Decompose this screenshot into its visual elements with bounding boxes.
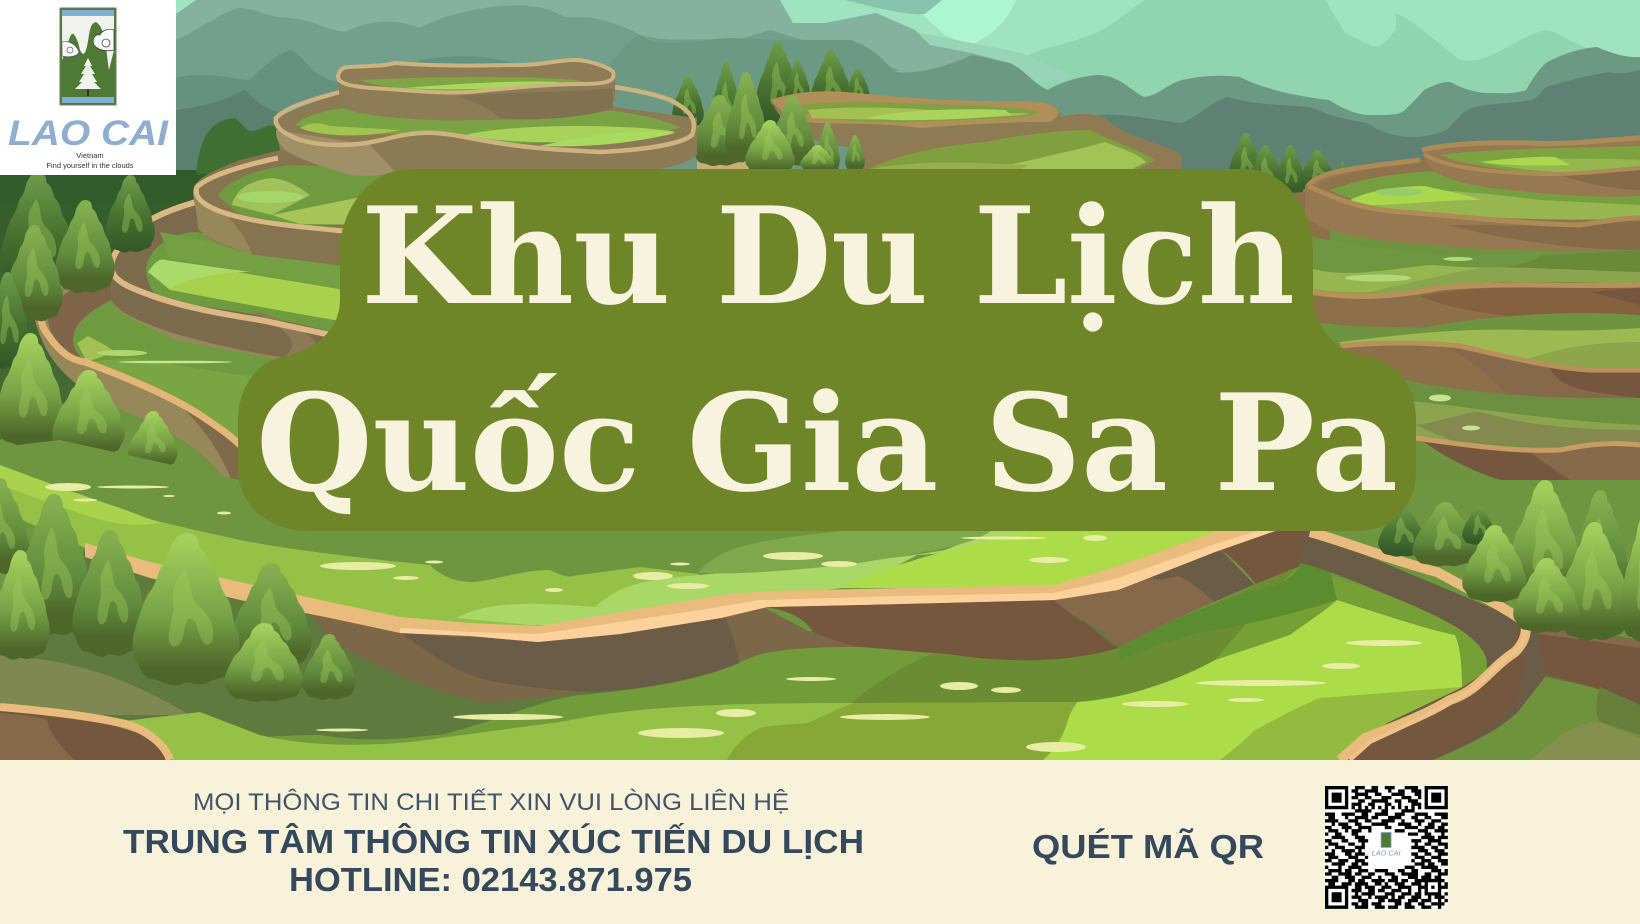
right terrace curve — [1300, 530, 1640, 760]
lower field — [70, 563, 1500, 760]
contact intro: MỌI THÔNG TIN CHI TIẾT XIN VUI LÒNG LIÊN HỆ — [193, 788, 789, 816]
organisation name: TRUNG TÂM THÔNG TIN XÚC TIẾN DU LỊCH — [123, 822, 864, 860]
upper forest cluster — [672, 42, 870, 142]
foreground trees left — [0, 478, 356, 702]
central terrace wall — [300, 531, 1311, 703]
sky and distant mountains — [0, 0, 1640, 260]
QR code — [1325, 786, 1448, 909]
foreground trees right — [1378, 480, 1640, 642]
title text — [256, 177, 1398, 522]
bottom left terrace — [0, 707, 172, 760]
right terraces — [1250, 138, 1640, 480]
logo emblem — [60, 8, 116, 105]
title text: Khu Du Lịch — [361, 177, 1295, 335]
upper centre terraces — [697, 91, 1182, 178]
left upper trees — [0, 172, 178, 468]
logo panel — [0, 0, 176, 175]
QR label: QUÉT MÃ QR — [1032, 828, 1264, 865]
left stepped terraces — [35, 60, 697, 530]
title text: Quốc Gia Sa Pa — [256, 364, 1398, 522]
QR centre logo: LAO CAI — [1372, 849, 1400, 858]
contact text — [123, 788, 864, 898]
footer band — [0, 760, 1640, 924]
logo tagline — [46, 151, 134, 170]
field highlights — [45, 483, 1422, 752]
right tree cluster — [1228, 133, 1350, 197]
forest band — [0, 118, 360, 440]
logo tagline: Find yourself in the clouds — [46, 161, 134, 170]
logo wordmark: LAO CAI — [8, 114, 169, 153]
title banner — [238, 169, 1416, 531]
main terrace rim — [85, 525, 1275, 642]
ground base — [0, 170, 1640, 760]
hotline: HOTLINE: 02143.871.975 — [289, 861, 692, 898]
upper forest front trees — [692, 72, 865, 174]
logo tagline: Vietnam — [76, 151, 104, 160]
foreground fields — [0, 440, 1640, 760]
